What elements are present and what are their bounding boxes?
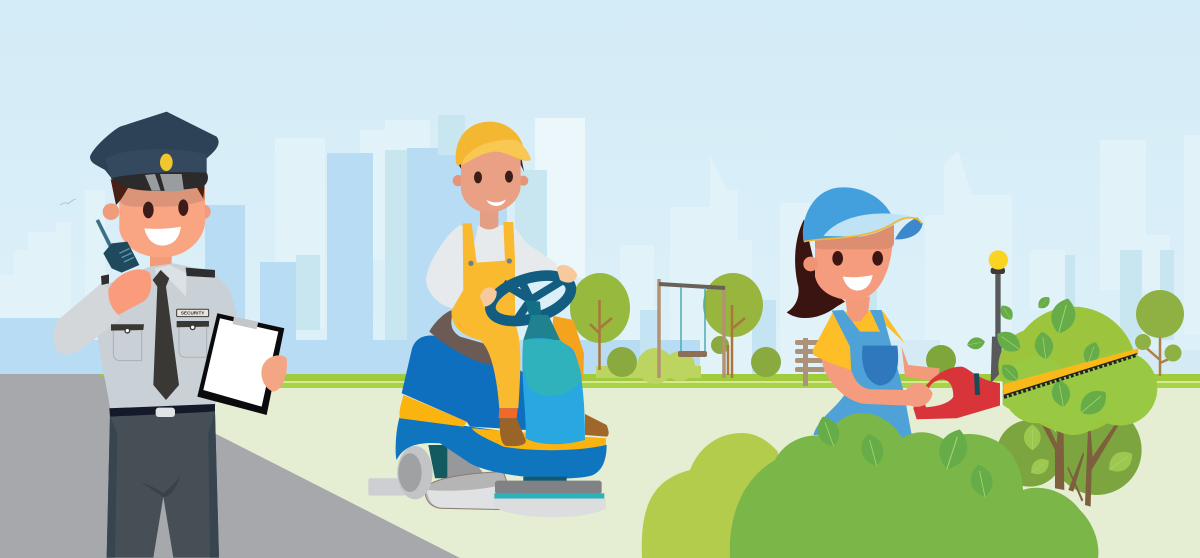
belt [109,404,215,417]
sleeve [53,282,120,355]
collar [155,265,187,297]
smile [843,275,873,291]
shrub leaves [966,294,1137,478]
shrub with hedge leaves [966,294,1157,507]
eyes [143,199,188,218]
steering wheel [485,267,576,330]
cleaning machine and driver [368,122,609,517]
hard cap [456,122,531,166]
grass strip [0,374,1200,388]
hair [111,179,205,205]
hand holding clipboard [261,355,287,392]
name tag: SECURITY [181,311,205,316]
seat [429,310,495,365]
epaulets [101,268,215,285]
security guard [53,112,287,558]
shrub top [998,307,1137,433]
eyes [832,251,883,266]
ears [453,175,528,186]
lamp post [989,250,1008,383]
ears [103,203,211,220]
boot [500,418,526,446]
blue overalls [813,310,913,440]
peaked hat [90,112,219,192]
hair [787,219,845,318]
console [522,300,585,444]
shirt [97,263,237,408]
tree [703,273,763,378]
shrub trunk [1027,393,1121,507]
orange hood [547,316,584,410]
buttons [468,258,512,266]
forehead shade [815,220,894,249]
hand [906,383,933,407]
shrub back [997,405,1142,495]
hedge leaves [813,413,996,499]
tree [570,273,630,370]
cap [803,187,923,242]
ear [803,257,818,271]
forehead shade [119,187,205,207]
city skyline [0,115,1200,374]
hair [459,150,524,175]
clipboard [197,313,284,415]
machine yellow stripe [400,395,467,427]
name tag [177,309,209,317]
white shirt [426,225,557,308]
front squeegee [493,477,606,517]
face [119,187,205,257]
machine lower body [396,417,607,479]
yellow shirt [813,312,905,382]
ankle cuff [499,408,518,418]
background bush [596,348,701,384]
eyes [474,171,513,183]
small tree [607,347,637,377]
hedge: left bush [642,433,778,558]
hands [480,265,577,307]
small tree [926,345,956,375]
tie [153,270,179,400]
buckle [156,408,175,417]
hedge: front bush [730,413,1098,558]
park: trees, swing and bench [570,273,1184,386]
bench [795,338,825,386]
small tree at right [1135,290,1184,376]
face [815,220,894,300]
shrub middle [998,351,1157,435]
pockets [111,321,209,361]
road [0,374,460,558]
trousers [107,412,219,558]
chest [843,310,880,332]
bird [60,199,76,205]
machine upper body [402,335,530,430]
machine platform [472,428,606,450]
driver [426,122,557,446]
gardener [787,187,1138,440]
yellow overalls [452,222,520,408]
swing set [659,279,725,378]
neck [150,250,172,270]
hand with radio [108,269,151,315]
machine rear parts [368,414,609,510]
rear arm [902,347,940,382]
radio [97,220,139,273]
smile [144,227,181,246]
neck [845,297,870,323]
smile [487,199,506,206]
sky [0,0,1200,376]
neck [480,210,498,230]
front arm [822,358,908,406]
small tree [751,347,781,377]
overalls pocket [862,346,898,386]
hedge trimmer [913,348,1138,419]
ground [0,388,1200,558]
face [461,143,521,213]
